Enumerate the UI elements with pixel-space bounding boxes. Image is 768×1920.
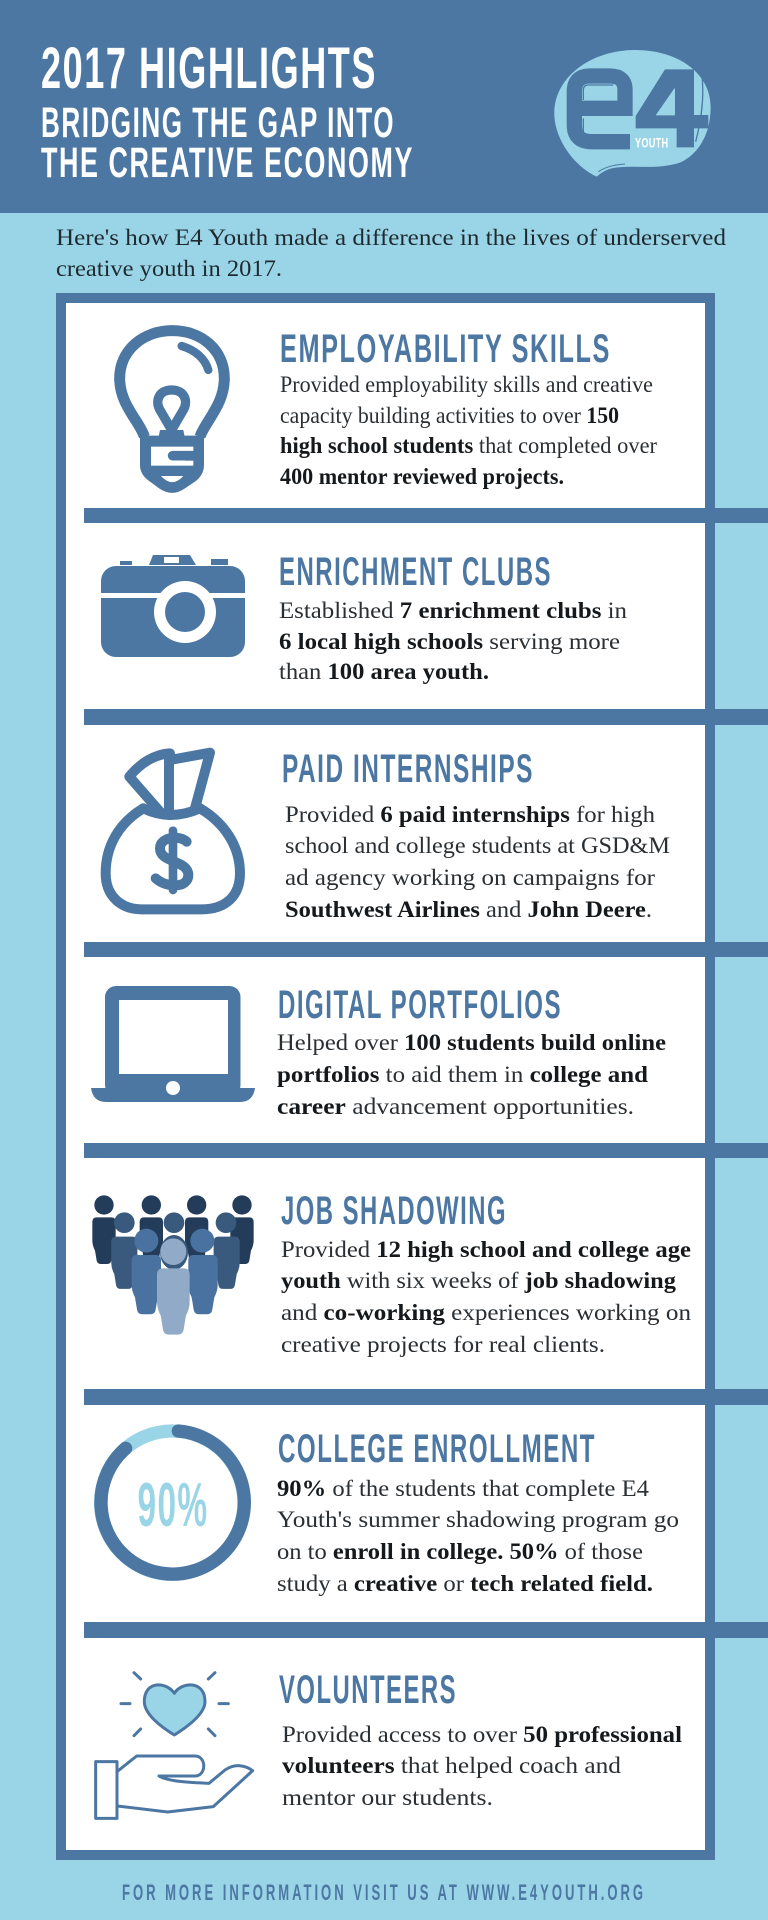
- intro text: creative youth in 2017.: [56, 256, 282, 282]
- title: BRIDGING THE GAP INTO: [41, 99, 395, 147]
- framed content panel: [61, 298, 710, 1855]
- text block: Provided 6 paid internships for high: [285, 802, 656, 827]
- title: 2017 HIGHLIGHTS: [41, 36, 377, 101]
- logo: E4 Youth speech bubble: [554, 50, 711, 177]
- text block: Established 7 enrichment clubs in: [279, 598, 628, 623]
- text block: capacity building activities to over 150: [280, 403, 619, 428]
- chart: 90% progress ring: 90%: [138, 1471, 208, 1540]
- header band: [0, 0, 768, 213]
- heading: DIGITAL PORTFOLIOS: [278, 983, 562, 1027]
- heading: ENRICHMENT CLUBS: [279, 550, 552, 594]
- text block: mentor our students.: [282, 1785, 493, 1810]
- text block: volunteers that helped coach and: [282, 1753, 622, 1778]
- panel: volunteers: [96, 1668, 682, 1818]
- text block: than 100 area youth.: [279, 659, 489, 684]
- text block: career advancement opportunities.: [277, 1094, 634, 1119]
- text block: creative projects for real clients.: [281, 1332, 605, 1357]
- icon: hand holding heart: [96, 1673, 253, 1818]
- text block: study a creative or tech related field.: [277, 1571, 653, 1596]
- text block: 90% of the students that complete E4: [277, 1476, 650, 1501]
- chart: 90% progress ring: [101, 1431, 244, 1574]
- text block: ad agency working on campaigns for: [285, 865, 655, 890]
- icon: camera: [101, 555, 245, 657]
- text block: Provided 12 high school and college age: [281, 1237, 691, 1262]
- text block: [277, 1476, 679, 1596]
- text block: [282, 1722, 682, 1810]
- text block: Provided access to over 50 professional: [282, 1722, 682, 1747]
- intro text: Here's how E4 Youth made a difference in the lives of underserved: [56, 225, 726, 251]
- text block: and co-working experiences working on: [281, 1300, 692, 1325]
- heading: VOLUNTEERS: [279, 1668, 457, 1712]
- panel: paid internships: [106, 747, 670, 922]
- panel: enrichment clubs: [101, 550, 628, 684]
- text block: Southwest Airlines and John Deere .: [285, 897, 652, 922]
- text block: portfolios to aid them in college and: [277, 1062, 648, 1087]
- icon: money bag: [106, 753, 240, 909]
- text block: school and college students at GSD&M: [285, 833, 670, 858]
- text block: youth with six weeks of job shadowing: [281, 1268, 677, 1293]
- intro text: [56, 225, 726, 282]
- text block: 6 local high schools serving more: [279, 629, 620, 654]
- text block: [281, 1237, 692, 1357]
- icon: light bulb: [120, 331, 224, 493]
- title: THE CREATIVE ECONOMY: [41, 139, 414, 187]
- text block: on to enroll in college. 50% of those: [277, 1539, 643, 1564]
- panel: college enrollment: [101, 1427, 679, 1596]
- icon: laptop: [91, 986, 255, 1102]
- text block: [279, 598, 628, 684]
- text block: Provided employability skills and creative: [280, 372, 653, 397]
- text block: [277, 1030, 666, 1119]
- icon: group of people: [92, 1195, 254, 1335]
- logo: E4 Youth speech bubble: YOUTH: [635, 135, 668, 151]
- text block: [285, 802, 670, 922]
- panel: digital portfolios: [91, 983, 666, 1119]
- panel: employability skills: [120, 327, 657, 493]
- title: [41, 36, 414, 187]
- heading: PAID INTERNSHIPS: [282, 747, 534, 791]
- text block: high school students that completed over: [280, 433, 657, 458]
- text block: [280, 372, 657, 489]
- panel: job shadowing: [92, 1189, 692, 1357]
- text block: Helped over 100 students build online: [277, 1030, 666, 1055]
- heading: JOB SHADOWING: [281, 1189, 507, 1233]
- text block: 400 mentor reviewed projects.: [280, 464, 564, 489]
- text block: Youth's summer shadowing program go: [277, 1507, 679, 1532]
